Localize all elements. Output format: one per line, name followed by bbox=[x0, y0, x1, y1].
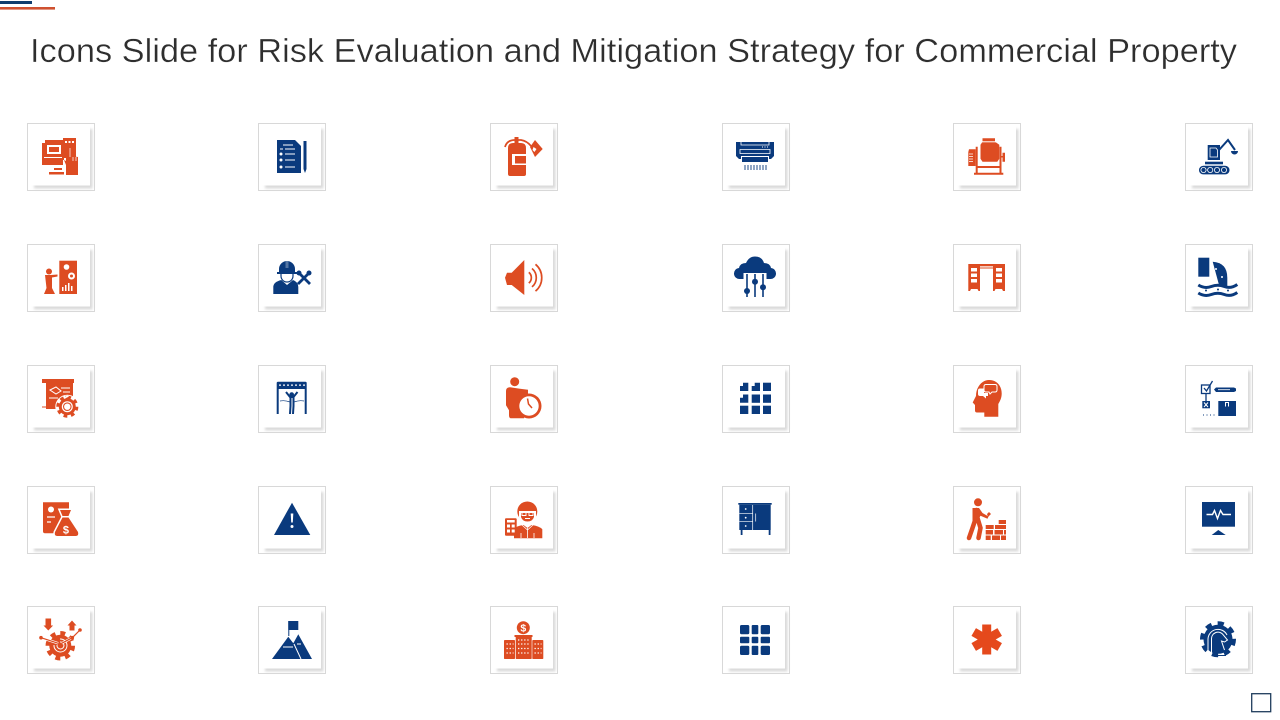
icon card: gear with knight chess piece bbox=[1186, 606, 1252, 674]
icon card: cabinet bbox=[722, 486, 790, 554]
icon card: asterisk bbox=[954, 606, 1020, 674]
icon card: stepped grid bbox=[722, 366, 790, 432]
icon card: office desk bbox=[954, 244, 1020, 312]
icon card: accountant with calculator bbox=[490, 486, 558, 554]
icon card: speaker with sound waves bbox=[490, 244, 558, 312]
icon card: cement mixer bbox=[954, 124, 1020, 190]
icon card: person with clock bbox=[490, 366, 558, 432]
icon card: presenter with chart board bbox=[28, 244, 94, 312]
title: Icons Slide for Risk Evaluation and Mitigation Strategy for Commercial Property bbox=[30, 32, 1238, 69]
icon card: mountain with flag bbox=[258, 606, 326, 674]
icon card: checklist, pen and box bbox=[1186, 366, 1252, 432]
accent bar: navy bbox=[0, 1, 32, 4]
icon card: air conditioner bbox=[722, 124, 790, 190]
slide number box bbox=[1252, 694, 1271, 712]
icon card: sinking ship bbox=[1186, 244, 1252, 312]
icon card: target gear with arrows bbox=[28, 606, 94, 674]
icon card: computer with touch hand bbox=[28, 124, 94, 190]
icon card: crawler crane bbox=[1186, 124, 1252, 190]
icon card: risk document and money bag bbox=[28, 486, 94, 554]
icon card: cloud with sliders bbox=[722, 244, 790, 312]
icon card: head with speech bubbles bbox=[954, 366, 1020, 432]
icon card: risk document and money bag: $ bbox=[63, 524, 69, 536]
icon card: engineer with tools bbox=[258, 244, 326, 312]
icon card: checklist document and pen bbox=[258, 124, 326, 190]
icon card: bricklayer bbox=[954, 486, 1020, 554]
icon card: monitor with pulse bbox=[1186, 486, 1252, 554]
icon card: fire extinguisher bbox=[490, 124, 558, 190]
icon card: finish line runner bbox=[258, 366, 326, 432]
icon card: warning triangle bbox=[258, 486, 326, 554]
icon card: blueprint with gear bbox=[28, 366, 94, 432]
icon card: bank buildings with dollar coin bbox=[490, 606, 558, 674]
accent bar: orange bbox=[0, 7, 55, 10]
icon card: nine-cell grid bbox=[722, 606, 790, 674]
icon card: bank buildings with dollar coin: $ bbox=[520, 622, 526, 634]
